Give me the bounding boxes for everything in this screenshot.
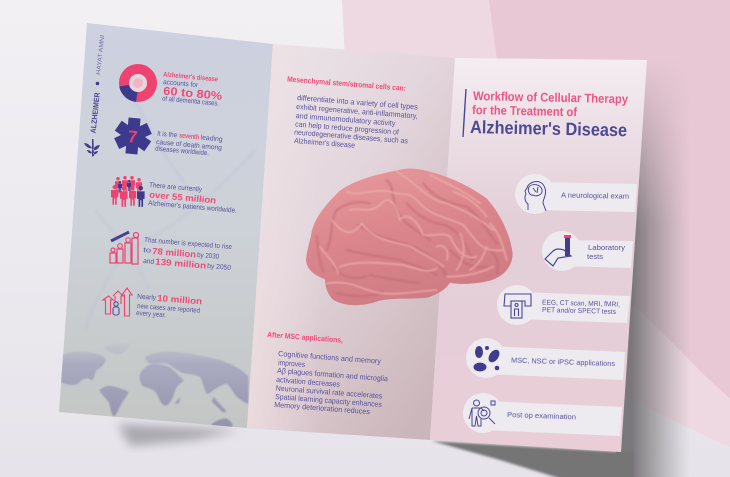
stat text: accounts for [163,79,199,89]
logo text: ALZHEIMER [89,91,102,134]
step label: Laboratory [588,243,625,252]
pill [515,174,637,214]
step label: A neurological exam [561,193,629,201]
step: cell applications [466,338,625,380]
background: dark pink shape [489,0,730,398]
text block: mesenchymal cells: differentiate into a variety of cell types [297,93,418,112]
stat text: over 55 million [149,190,216,205]
brain illustration [306,169,513,305]
stat text: of all dementia cases. [162,96,219,108]
stat: dementia share [119,69,223,108]
icon: person with target [469,400,495,426]
stat text: and [143,258,154,266]
icon: rising arrows [103,288,132,316]
panel: middle [247,44,455,440]
logo sidebar [84,34,106,156]
pill [542,231,633,271]
step label: EEG, CT scan, MRI, fMRI, [542,300,620,309]
step label: Post op examination [507,412,576,421]
shadow: right of brochure [616,76,686,477]
stat text: Alzheimer's disease [163,72,218,83]
stat: projected growth [110,232,232,272]
pill [466,338,625,380]
step label [587,243,625,261]
icon: head with brain [525,182,546,211]
stat: new cases [103,288,202,319]
text block: mesenchymal cells [287,75,418,150]
step: imaging tests [497,285,630,325]
icon: crowd [111,176,145,207]
text block: after MSC applications: Memory deterioration reduces [274,400,370,416]
icon: cells [474,346,502,372]
step label [542,300,620,316]
step: laboratory tests [542,231,633,271]
title [463,89,628,140]
step label: tests [587,252,603,261]
logo dot [96,82,99,85]
stat text: to [143,247,152,255]
text block: after MSC applications [267,330,389,416]
step label: PET and/or SPECT tests [542,307,617,316]
donut chart [119,69,152,102]
pill [497,285,630,325]
stat text [143,237,232,272]
stat text: Alzheimer's patients worldwide. [148,200,237,215]
panel: middle lower left tint [247,44,455,440]
stat text: Nearly [137,294,157,302]
stat text: 139 million [155,257,206,271]
stat text: leading [200,135,223,143]
stat text: by 2050 [207,263,231,272]
stat text: 78 million [152,246,196,260]
stat text: 60 to 80% [163,86,223,103]
text block: mesenchymal cells: exhibit regenerative, anti-inflammatory, [296,102,418,121]
text block: mesenchymal cells: Alzheimer's disease [294,136,355,150]
step: post op examination [463,393,622,436]
stat text: There are currently [149,182,203,194]
stat text [155,131,223,157]
faint neuron lines [85,90,255,330]
step label: MSC, NSC or iPSC applications [511,358,616,368]
logo subtitle: HAYAT AMNI [96,34,106,75]
stat text: It is the [157,131,177,139]
shadow: under right panel [432,441,634,477]
text block: after MSC applications: After MSC applications, [267,330,343,345]
stat text: new cases are reported [137,303,200,315]
shadow: under left panel [118,424,240,446]
panel: right [430,58,647,452]
stat: seventh leading cause [113,116,223,157]
stat text [162,72,223,108]
text block: mesenchymal cells: and immunomodulatory activity [295,111,396,128]
title: for the Treatment of [472,103,578,119]
step: neurological exam [515,174,637,214]
text block: after MSC applications: activation decreases [276,375,341,389]
title: Alzheimer's Disease [470,117,627,140]
text block: after MSC applications: improves [278,358,306,369]
text block: mesenchymal cells: neurodegenerative diseases, such as [294,128,408,145]
stat text: seventh [179,133,199,141]
icon: growing bars with syringe [110,232,138,264]
stat text [136,293,202,319]
text block: mesenchymal cells: can help to reduce progression of [295,120,400,137]
stat text: That number is expected to rise [144,237,232,251]
background: light pink shape [342,0,730,447]
icon: star of life: 7 [127,127,138,147]
stat text: diseases worldwide. [155,146,209,157]
stat: patients worldwide [111,176,237,215]
text block: after MSC applications: Aβ plagues formation and microglia [277,366,389,383]
panel: left facts [57,23,273,433]
text block: after MSC applications: Cognitive functions and memory [278,349,381,366]
icon: hand with test tube [545,235,571,266]
stat text: every year. [136,310,166,319]
stat text [148,182,237,215]
icon: scanner [504,294,531,318]
icon: caduceus logo [84,139,100,156]
world map [61,348,249,427]
pill [463,393,622,436]
text block: mesenchymal cells: Mesenchymal stem/stromal cells can: [287,75,406,93]
stat text: by 2030 [197,252,219,261]
text block: after MSC applications: Neuronal survival rate accelerates [275,384,383,401]
stat text: cause of death among [156,139,222,152]
text block: after MSC applications: Spatial learning capacity enhances [275,392,382,409]
title: Workflow of Cellular Therapy [473,89,628,106]
stat text: 10 million [157,293,202,306]
